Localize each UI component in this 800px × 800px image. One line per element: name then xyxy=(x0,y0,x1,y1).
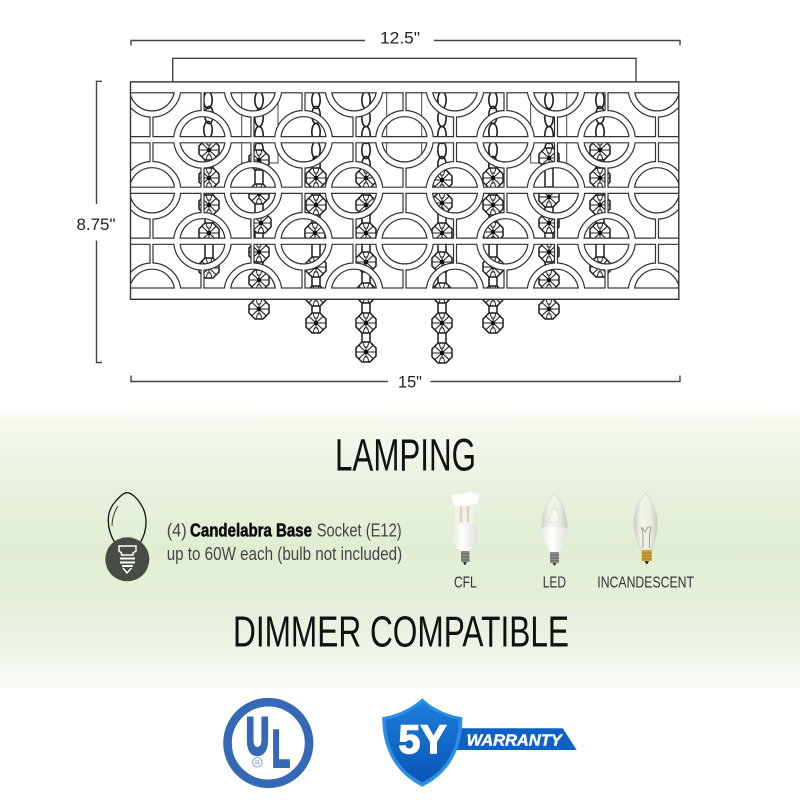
text: socket specification: Socket (E12) xyxy=(317,520,402,541)
shield label: 5Y xyxy=(398,718,447,762)
dimension: 15 inch width: 15" xyxy=(398,372,422,392)
text: socket specification: Candelabra Base xyxy=(190,520,312,541)
dimension: 15 inch width xyxy=(131,372,680,392)
icon: UL certification mark: L xyxy=(272,721,290,779)
icon: UL certification mark: R xyxy=(255,760,260,767)
ribbon label: WARRANTY xyxy=(467,733,563,750)
icon: LED bulb xyxy=(542,493,567,566)
icon: candelabra bulb xyxy=(105,493,149,581)
text: socket specification xyxy=(167,520,402,564)
heading: lamping: LAMPING xyxy=(335,430,476,481)
lattice shade xyxy=(131,90,678,299)
crystals xyxy=(199,140,610,363)
icon: CFL bulb xyxy=(450,492,480,565)
label: LED: LED xyxy=(543,574,566,591)
label: incandescent: INCANDESCENT xyxy=(597,574,694,591)
fixture line drawing xyxy=(126,63,683,363)
canopy outline xyxy=(173,58,636,82)
warranty ribbon xyxy=(454,728,577,750)
crystal chains xyxy=(204,91,604,352)
dimension: 12.5 inch width: 12.5" xyxy=(380,28,420,48)
text: socket specification: (4) xyxy=(167,520,187,541)
icon: UL certification mark: U xyxy=(246,708,269,766)
heading: dimmer compatible: DIMMER COMPATIBLE xyxy=(233,608,569,657)
inner structure xyxy=(242,92,567,163)
label: CFL: CFL xyxy=(454,574,477,591)
shield xyxy=(382,698,462,787)
dimension: 8.75 inch height: 8.75" xyxy=(76,215,116,234)
icon: UL certification mark xyxy=(227,702,309,784)
icon: incandescent bulb xyxy=(634,493,657,564)
shade outline xyxy=(130,82,679,299)
dimension: 12.5 inch width xyxy=(131,28,680,48)
icon: 5 year warranty shield xyxy=(382,698,577,787)
dimension: 8.75 inch height xyxy=(76,81,116,363)
background: green gradient band xyxy=(0,406,800,688)
text: socket specification: up to 60W each (bulb not included) xyxy=(167,543,402,564)
